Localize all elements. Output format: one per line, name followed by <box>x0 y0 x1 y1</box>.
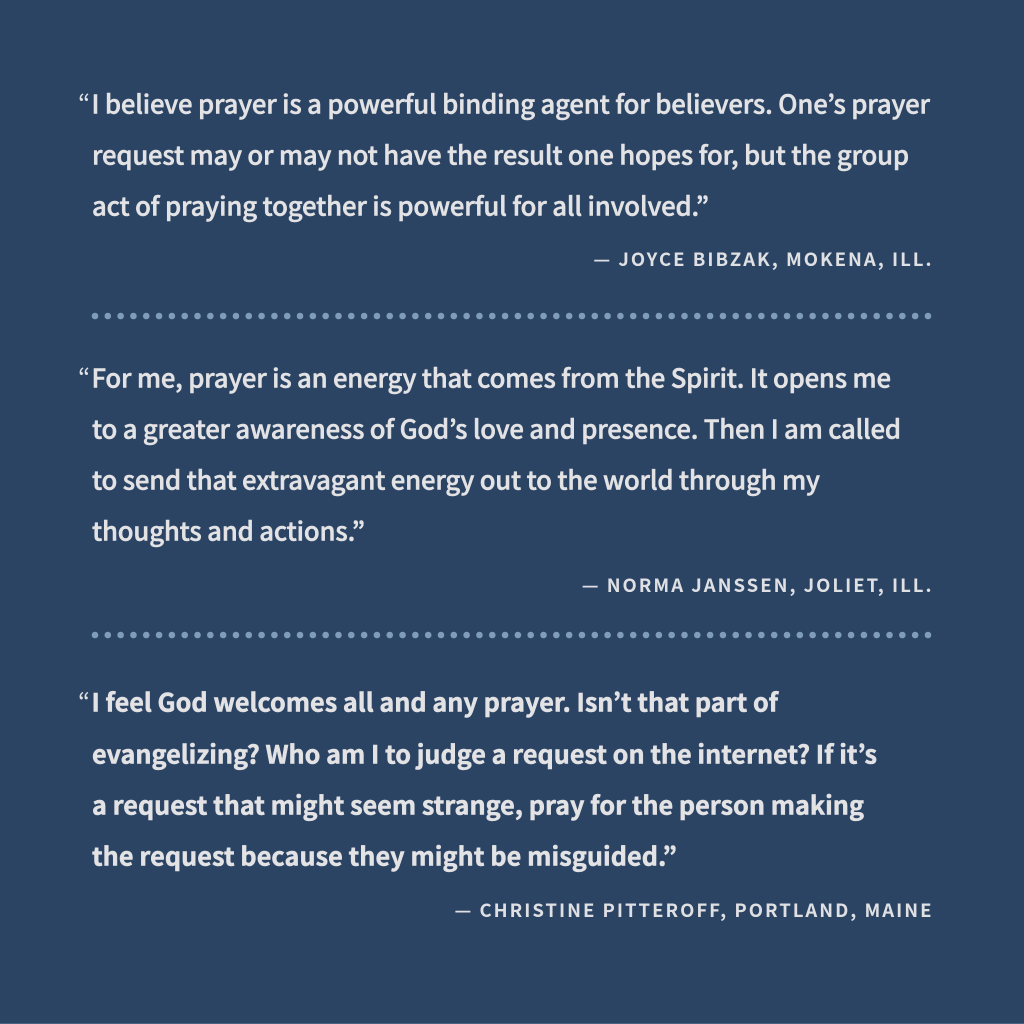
quote 2 text: to send that extravagant energy out to the world through my <box>92 460 820 498</box>
quote 1 attribution: — JOYCE BIBZAK, MOKENA, ILL. <box>593 246 934 272</box>
quote 1 text: “I believe prayer is a powerful binding agent for believers. One’s prayer <box>78 84 930 122</box>
dotted divider 2 <box>95 632 929 638</box>
quote 1: Joyce Bibzak <box>78 84 934 272</box>
dotted divider 1 <box>95 313 929 319</box>
quote 1 text: request may or may not have the result one hopes for, but the group <box>92 136 909 172</box>
quote 2: Norma Janssen <box>78 358 934 598</box>
quote 3 text: evangelizing? Who am I to judge a request on the internet? If it’s <box>92 736 877 772</box>
quote 2 text: to a greater awareness of God’s love and presence. Then I am called <box>92 410 901 446</box>
quote 1 text: act of praying together is powerful for all involved.” <box>92 186 709 224</box>
quote 3 text: a request that might seem strange, pray for the person making <box>92 786 864 822</box>
quote 1 text <box>78 84 930 224</box>
quote 3 text: the request because they might be misguided.” <box>92 838 677 874</box>
quote 2 text: thoughts and actions.” <box>92 512 365 548</box>
quote 2 attribution: — NORMA JANSSEN, JOLIET, ILL. <box>582 572 934 598</box>
quote 3: Christine Pitteroff <box>78 684 934 923</box>
quote 2 text <box>78 358 901 548</box>
quote 3 attribution: — CHRISTINE PITTEROFF, PORTLAND, MAINE <box>454 897 934 923</box>
quote 2 text: “For me, prayer is an energy that comes from the Spirit. It opens me <box>78 358 891 396</box>
quote 3 text <box>78 684 877 874</box>
quote 3 text: “I feel God welcomes all and any prayer. Isn’t that part of <box>78 684 780 720</box>
